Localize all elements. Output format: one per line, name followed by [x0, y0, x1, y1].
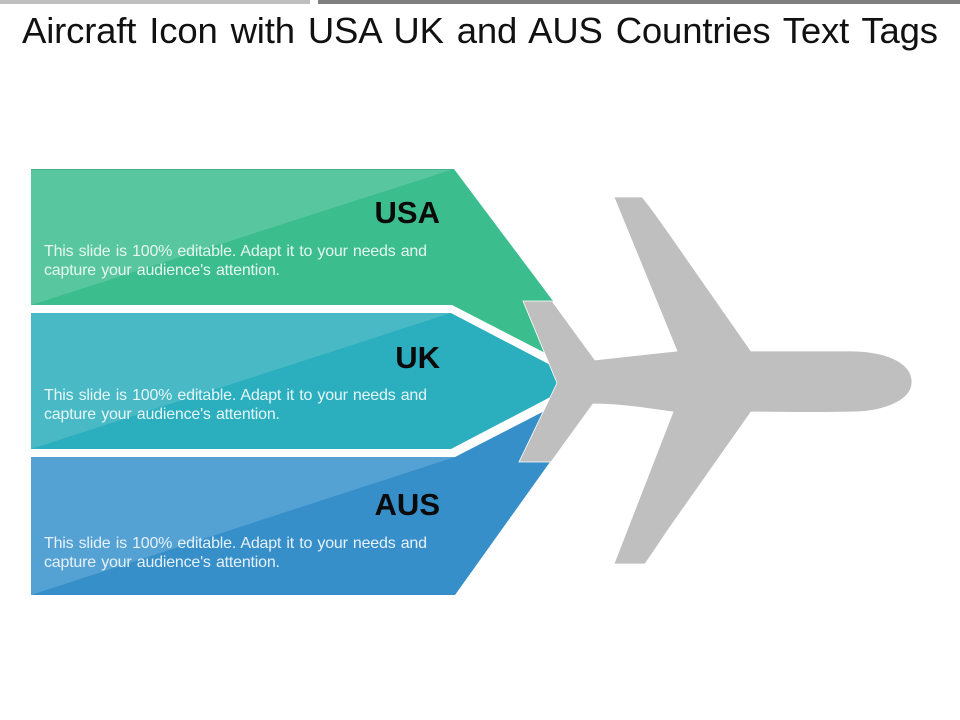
- panel: AUS: [31, 403, 560, 595]
- panel: USA: [31, 169, 553, 357]
- label: AUS: AUS: [375, 487, 440, 522]
- body text: UK: capture your audience's attention.: [44, 406, 280, 423]
- icon: aircraft: [519, 197, 912, 564]
- body text: UK: This slide is 100% editable. Adapt it to your needs and: [44, 387, 427, 404]
- body text: AUS: capture your audience's attention.: [44, 554, 280, 571]
- panel: UK: [31, 313, 560, 449]
- label: USA: USA: [375, 195, 440, 230]
- body text: USA: This slide is 100% editable. Adapt it to your needs and: [44, 243, 427, 260]
- body text: AUS: [44, 535, 427, 571]
- body text: UK: [44, 387, 427, 423]
- title: Aircraft Icon with USA UK and AUS Countries Text Tags: [22, 10, 938, 51]
- label: UK: UK: [395, 340, 441, 375]
- body text: USA: capture your audience's attention.: [44, 262, 280, 279]
- body text: USA: [44, 243, 427, 279]
- body text: AUS: This slide is 100% editable. Adapt it to your needs and: [44, 535, 427, 552]
